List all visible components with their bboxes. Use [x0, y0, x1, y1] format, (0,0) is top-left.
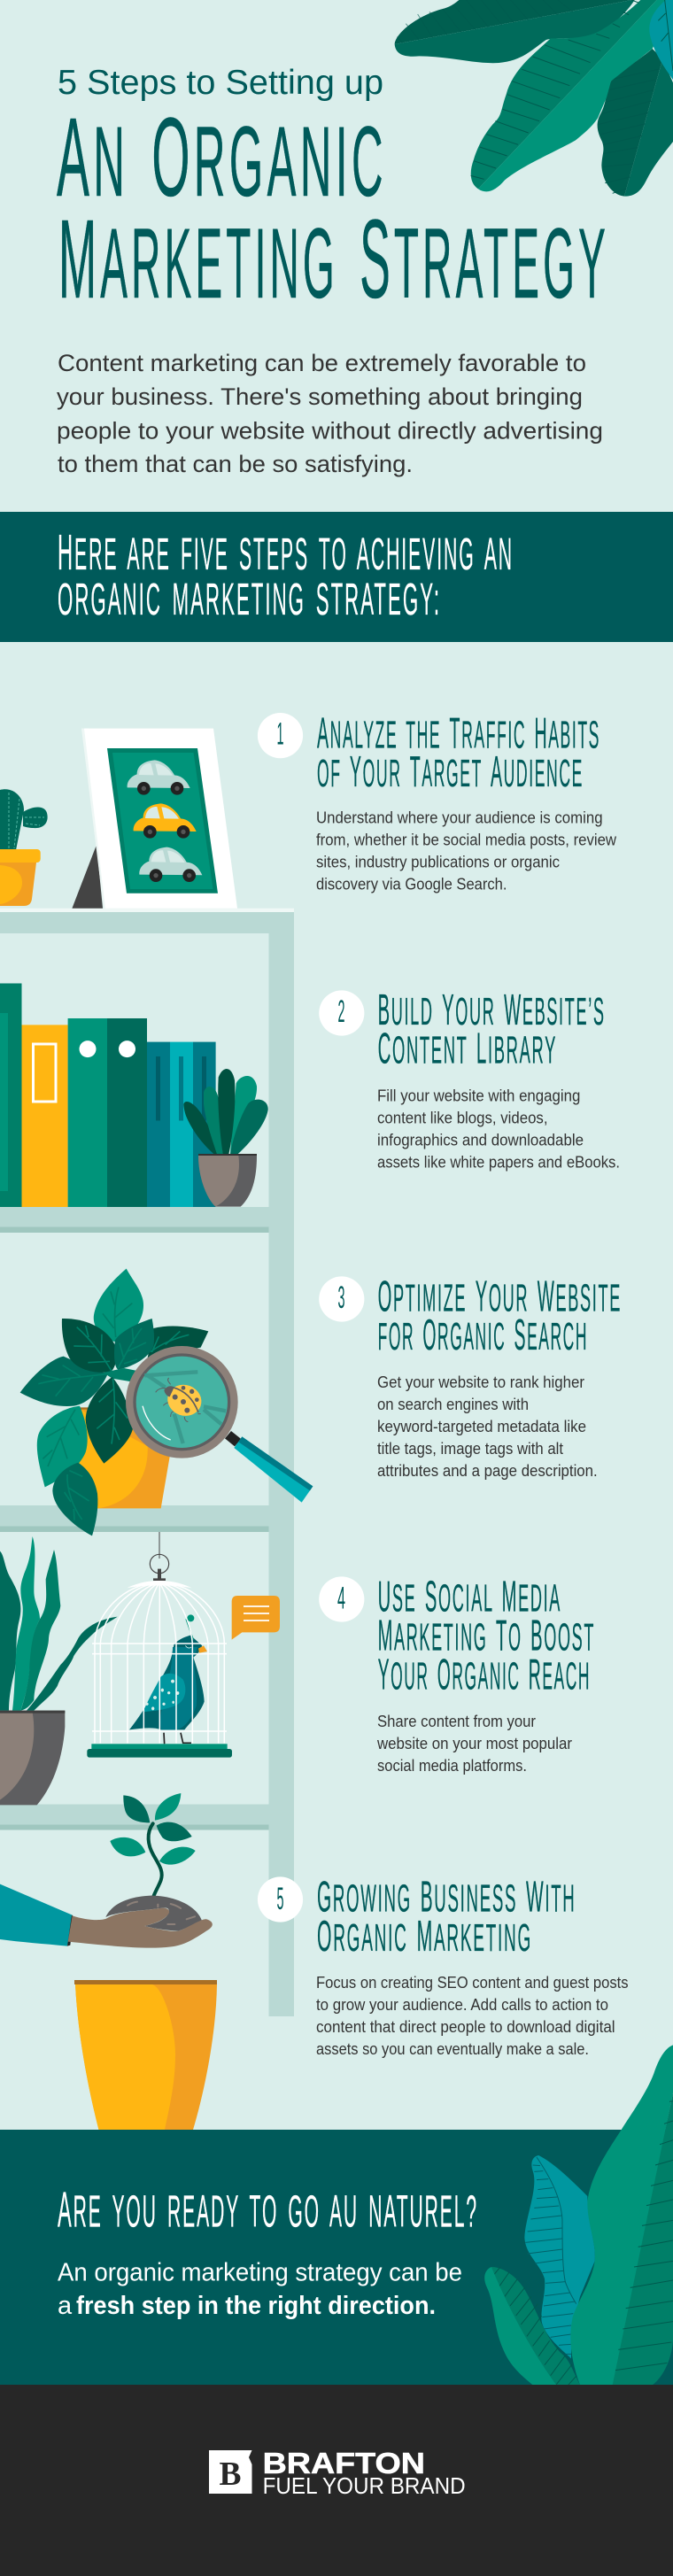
- step 3 text: title tags, image tags with alt: [377, 1440, 563, 1458]
- magnifying glass: [126, 1346, 313, 1503]
- step 5 text: content that direct people to download digital: [316, 2018, 615, 2036]
- number badge 2: 2: [338, 994, 345, 1029]
- step 1 text: from, whether it be social media posts, review: [316, 831, 617, 848]
- panel: footer: [0, 2385, 673, 2576]
- step 2 heading: CONTENT LIBRARY: [378, 1025, 557, 1073]
- cage base: [87, 1744, 232, 1758]
- step 4 heading: MARKETING TO BOOST: [378, 1612, 595, 1659]
- step 4 heading: USE SOCIAL MEDIA: [378, 1574, 561, 1621]
- car 1: [128, 760, 190, 795]
- step 3 heading: FOR ORGANIC SEARCH: [378, 1311, 588, 1359]
- logo: Brafton: [209, 2447, 466, 2499]
- number badge 3: 3: [338, 1280, 345, 1315]
- step 3: [319, 1273, 622, 1480]
- step 1 text: discovery via Google Search.: [316, 875, 507, 893]
- call to action text: An organic marketing strategy can be: [58, 2258, 462, 2286]
- intro text: your business. There's something about bringing: [57, 383, 583, 410]
- logo: Brafton: FUEL YOUR BRAND: [263, 2474, 466, 2499]
- step 4: [319, 1574, 595, 1775]
- number badge 3: [319, 1276, 364, 1322]
- step 3 text: keyword-targeted metadata like: [377, 1418, 586, 1435]
- step 2 text: assets like white papers and eBooks.: [377, 1154, 620, 1172]
- step 5 text: assets so you can eventually make a sale.: [316, 2040, 589, 2058]
- step 1 heading: [317, 710, 600, 796]
- cage bars: [92, 1581, 227, 1744]
- number badge 4: 4: [337, 1582, 345, 1615]
- icon: top right leaves: [395, 0, 673, 197]
- step 4 heading: [378, 1574, 595, 1699]
- icon: large yellow pot: [74, 1980, 217, 2130]
- panel: call to action: [0, 2045, 673, 2385]
- title line: An Organic: AN ORGANIC: [57, 95, 387, 220]
- step 4 text: social media platforms.: [377, 1757, 527, 1775]
- icon: ladybug: [156, 1378, 205, 1422]
- step 4 text: Share content from your: [377, 1713, 536, 1730]
- icon: leafy plant and magnifying glass: [20, 1269, 313, 1536]
- step 1 heading: ANALYZE THE TRAFFIC HABITS: [317, 710, 600, 758]
- step 5 text: Focus on creating SEO content and guest posts: [316, 1974, 629, 1992]
- books on shelf: [0, 983, 216, 1207]
- icon: potted plant on book shelf: [183, 1069, 268, 1207]
- step 2 text: [377, 1087, 620, 1172]
- number badge 1: [258, 713, 303, 758]
- step 1 text: sites, industry publications or organic: [316, 853, 560, 870]
- icon: cactus in pot: [0, 789, 48, 906]
- step 5 text: [316, 1974, 629, 2058]
- step 4 heading: YOUR ORGANIC REACH: [378, 1652, 591, 1699]
- step 1 text: Understand where your audience is coming: [316, 808, 603, 826]
- number badge 2: [319, 990, 364, 1036]
- step 5 text: to grow your audience. Add calls to action to: [316, 1996, 608, 2014]
- step 1: [258, 710, 617, 893]
- step 3 text: on search engines with: [377, 1396, 529, 1413]
- subtitle: 5 Steps to Setting up: [58, 64, 383, 102]
- intro text: people to your website without directly advertising: [57, 418, 603, 445]
- step 2 heading: [378, 986, 606, 1073]
- step 4 text: website on your most popular: [376, 1735, 572, 1752]
- step 2 text: infographics and downloadable: [377, 1132, 584, 1149]
- step 3 heading: [378, 1273, 622, 1359]
- number badge 1: 1: [276, 717, 283, 751]
- step 2 text: Fill your website with engaging: [377, 1087, 580, 1105]
- number badge 5: [258, 1876, 303, 1922]
- icon: framed picture of cars: [72, 729, 237, 909]
- car 3: [139, 847, 202, 882]
- car 2: [134, 803, 197, 839]
- step 2: [319, 986, 620, 1172]
- intro text: [57, 350, 603, 477]
- step 3 text: Get your website to rank higher: [377, 1373, 584, 1391]
- step 5: [258, 1874, 629, 2058]
- call to action text: a: [58, 2292, 73, 2320]
- number badge 4: [319, 1576, 364, 1622]
- intro text: Content marketing can be extremely favorable to: [58, 350, 586, 376]
- logo: Brafton: B: [220, 2456, 241, 2493]
- step 5 heading: GROWING BUSINESS WITH: [317, 1874, 576, 1922]
- banner: five steps: [0, 512, 673, 642]
- icon: hand holding sprout: [0, 1793, 213, 1948]
- step 1 text: [316, 808, 617, 893]
- call to action text: fresh step in the right direction.: [76, 2292, 436, 2320]
- icon: speech bubble: [232, 1596, 280, 1640]
- shelf unit: [0, 909, 294, 2016]
- icon: bottom right leaves: [484, 2045, 673, 2385]
- step 4 text: [376, 1713, 572, 1775]
- call to action text: [58, 2258, 462, 2320]
- number badge 5: 5: [276, 1882, 283, 1916]
- step 3 text: [377, 1373, 598, 1480]
- intro text: to them that can be so satisfying.: [58, 451, 413, 477]
- step 5 heading: ORGANIC MARKETING: [317, 1913, 532, 1961]
- step 3 text: attributes and a page description.: [377, 1462, 598, 1480]
- logo: Brafton: BRAFTON: [263, 2447, 425, 2479]
- step 5 heading: [317, 1874, 576, 1961]
- icon: bird in cage: [87, 1532, 280, 1758]
- step 2 text: content like blogs, videos,: [377, 1110, 547, 1127]
- bird: [129, 1614, 207, 1744]
- icon: tall plant in gray pot: [0, 1536, 118, 1805]
